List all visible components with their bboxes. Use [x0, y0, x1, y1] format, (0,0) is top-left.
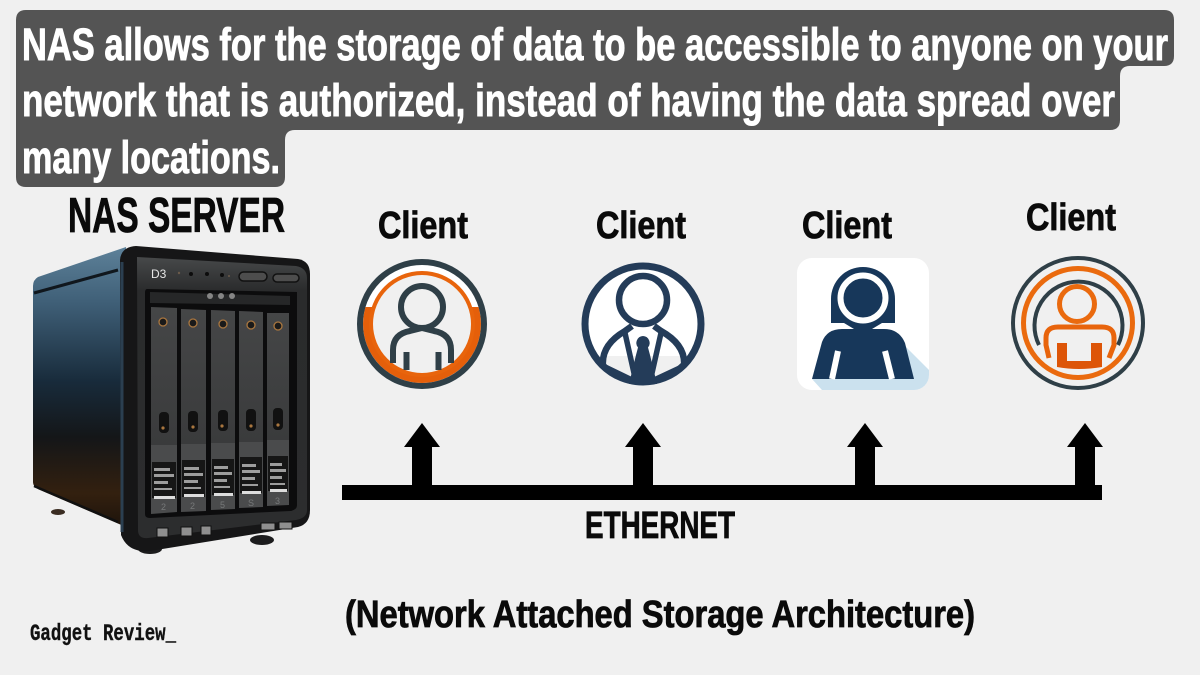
label: ethernet: ETHERNET [585, 505, 735, 547]
front face plate [137, 257, 307, 538]
head [1060, 286, 1094, 322]
label: client 1: Client [378, 205, 468, 247]
tray 5: 3 [275, 496, 280, 506]
person shoulders [393, 328, 451, 363]
indicator lights [178, 272, 230, 277]
bay status icons [207, 293, 235, 299]
callout: NAS description [16, 10, 1174, 187]
jacket lapels [603, 333, 684, 382]
icon: client 4 person in concentric rings [1013, 258, 1143, 388]
arrow: client 2 [625, 423, 661, 486]
white disc [585, 266, 701, 382]
inner arc [1034, 282, 1122, 345]
network and USB ports [157, 522, 292, 537]
icon: client 3 woman in white tile [797, 258, 929, 390]
arm lines [832, 351, 892, 379]
tie [629, 336, 657, 384]
label: client 3: Client [802, 205, 892, 247]
front housing edge highlight [120, 262, 124, 532]
shoulders [1046, 327, 1114, 358]
torso U [1057, 343, 1102, 369]
callout text line 3: many locations. [22, 132, 280, 183]
icon: client 1 person in orange ring [360, 262, 484, 386]
icon: client 2 businessman [585, 266, 701, 386]
tray 1 [151, 307, 177, 514]
tray 3 [211, 310, 235, 510]
outer ring [585, 266, 701, 382]
outer ring [1013, 258, 1143, 388]
heading: NAS server: NAS SERVER [68, 189, 285, 243]
tray 4 [239, 311, 263, 508]
tray 3: 5 [220, 500, 225, 510]
front logo: D3 [151, 267, 167, 281]
face [840, 276, 886, 320]
arrow: client 4 [1067, 423, 1103, 486]
caption: architecture: (Network Attached Storage Architecture) [345, 594, 975, 636]
callout background [16, 10, 1174, 187]
logo: Gadget Review: Gadget Review_ [30, 621, 176, 647]
ethernet bus line [342, 485, 1102, 500]
ring backing [362, 264, 482, 384]
drive trays [151, 307, 289, 514]
tray 4: S [248, 498, 254, 508]
bay top bar [150, 292, 290, 305]
hair [831, 267, 895, 329]
arrow: client 1 [404, 423, 440, 486]
body [812, 329, 914, 379]
label: client 2: Client [596, 205, 686, 247]
tray 2: 2 [190, 501, 195, 511]
head [619, 276, 667, 324]
ring interior [373, 275, 471, 373]
white tile [797, 258, 929, 390]
tile long shadow [812, 346, 929, 390]
server feet [51, 509, 274, 554]
tray 2 [181, 309, 206, 512]
person arms [406, 352, 438, 370]
shoulders [603, 326, 684, 366]
server side panel [33, 247, 126, 527]
front buttons [239, 272, 299, 282]
drive bay recess [145, 289, 297, 518]
server front housing [120, 246, 310, 551]
orange ring [1024, 268, 1132, 378]
tray 5 [267, 313, 289, 506]
person head [401, 286, 443, 328]
label: client 4: Client [1026, 197, 1116, 239]
illustration: NAS server device [33, 246, 310, 554]
arrow: client 3 [847, 423, 883, 486]
orange ring lower band [363, 307, 481, 383]
outer dark ring [360, 262, 484, 386]
tray 1: 2 [161, 502, 166, 512]
lower disc shading [599, 356, 681, 376]
orange ring upper band [369, 271, 475, 377]
